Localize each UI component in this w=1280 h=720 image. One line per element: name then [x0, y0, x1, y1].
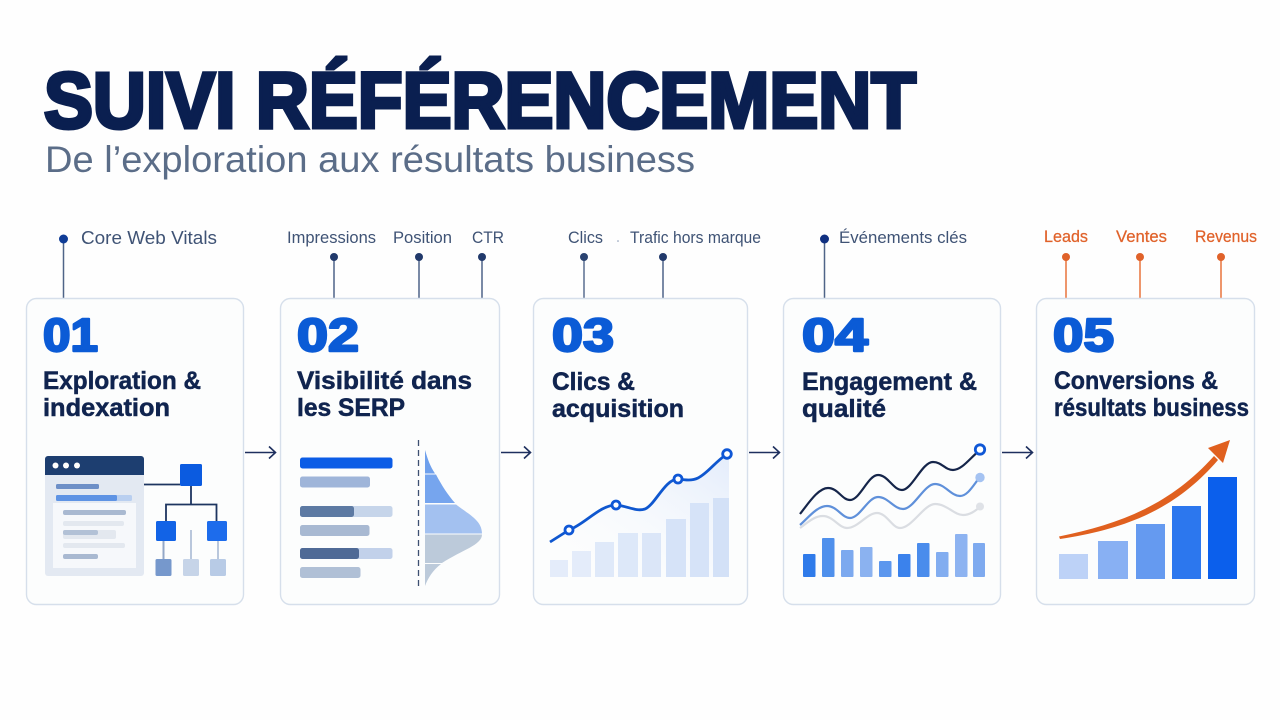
heading 03: acquisition: [552, 395, 684, 423]
chart: revenue bars: [1059, 477, 1237, 579]
metric: Core Web Vitals: Core Web Vitals: [81, 228, 217, 248]
heading 02: les SERP: [297, 394, 405, 422]
number 02: 02: [297, 309, 359, 361]
metric: Ventes: Ventes: [1116, 227, 1167, 246]
heading 04: Engagement &: [802, 368, 977, 396]
number 01: 01: [43, 309, 98, 361]
heading 05: résultats business: [1054, 394, 1249, 422]
chart: engagement bars: [803, 534, 985, 577]
arrow 2: [501, 446, 530, 458]
heading 03: Clics &: [552, 368, 635, 396]
number 04: 04: [802, 309, 869, 361]
arrow 3: [749, 446, 780, 458]
chart: engagement lines: [800, 445, 985, 528]
heading 04: qualité: [802, 395, 886, 423]
title: SUIVI RÉFÉRENCEMENT: [44, 56, 916, 144]
metric: Revenus: Revenus: [1195, 227, 1257, 246]
panel: 03 clicks: [534, 298, 748, 604]
metric: CTR: CTR: [472, 228, 504, 247]
heading 02: Visibilité dans: [297, 367, 472, 395]
number 03: 03: [552, 309, 614, 361]
metric: Revenus: [1195, 227, 1257, 298]
metric: Clics: Clics: [568, 228, 603, 247]
heading 05: Conversions &: [1054, 367, 1218, 395]
chart: position distribution: [418, 440, 482, 590]
subtitle: De l’exploration aux résultats business: [45, 139, 695, 180]
metric: Position: [393, 228, 452, 298]
metric: Impressions: [287, 228, 376, 298]
metric: Impressions: Impressions: [287, 228, 376, 247]
metric: CTR: [472, 228, 504, 298]
icon: site tree: [144, 464, 227, 576]
metric: Événements clés: Événements clés: [839, 228, 967, 247]
metric: Ventes: [1116, 227, 1167, 298]
metric: Core Web Vitals: [59, 228, 217, 298]
arrow 1: [245, 446, 276, 458]
metric: Leads: [1044, 227, 1088, 298]
metric: Leads: Leads: [1044, 227, 1088, 246]
number 05: 05: [1053, 309, 1114, 361]
icon: browser window: [45, 456, 144, 576]
panel: 05 conversions: [1036, 298, 1254, 604]
metric: Position: Position: [393, 228, 452, 247]
metric: Clics: [568, 228, 603, 298]
chart: traffic growth: [550, 450, 731, 577]
metric: Événements clés: [820, 228, 967, 298]
metric: Trafic hors marque: [617, 228, 761, 298]
arrow 4: [1002, 446, 1032, 458]
heading 01: indexation: [43, 394, 170, 422]
panel: 01 exploration: [26, 298, 244, 604]
panel: 02 visibility: [280, 298, 500, 604]
heading 01: Exploration &: [43, 367, 201, 395]
arrow: growth: [1059, 440, 1230, 539]
metric: Trafic hors marque: Trafic hors marque: [630, 228, 761, 247]
chart: SERP bars: [300, 458, 392, 578]
panel: 04 engagement: [784, 298, 1000, 604]
